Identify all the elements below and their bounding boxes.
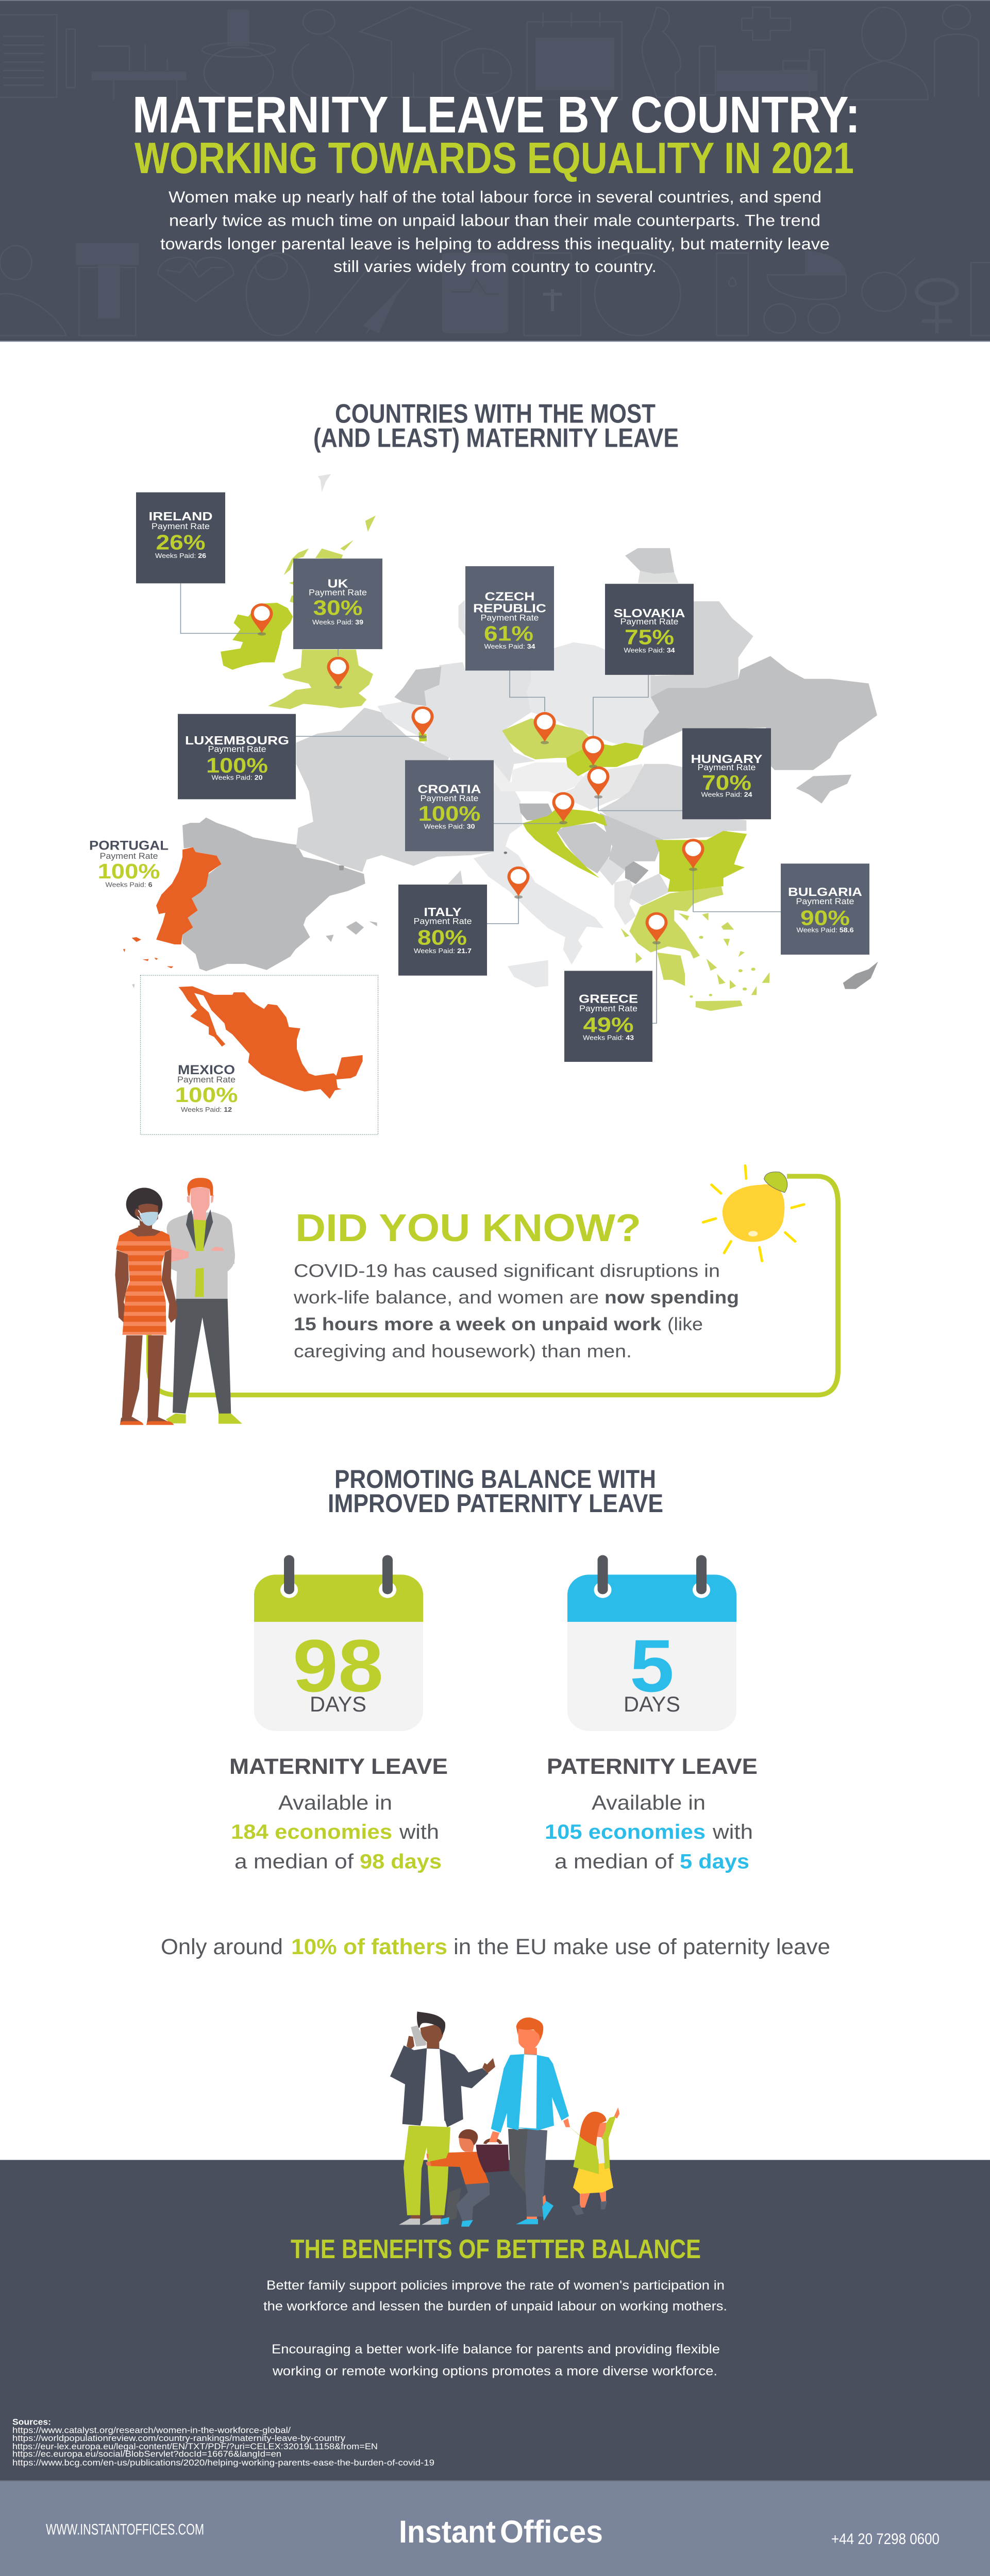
card: Greece bbox=[564, 971, 652, 1062]
map: Spain bbox=[182, 818, 365, 971]
card: Czech Republic: 61% bbox=[484, 622, 533, 645]
text: COVID-19 callout: COVID-19 has caused significant disruptions in bbox=[294, 1261, 720, 1281]
map: Hungary bbox=[557, 764, 644, 809]
woman figure bbox=[115, 1188, 177, 1425]
card: Italy: Weeks Paid: 21.7 bbox=[414, 947, 472, 955]
heading: benefits of better balance: THE BENEFITS OF BETTER BALANCE bbox=[291, 2234, 701, 2264]
map: North Macedonia bbox=[629, 873, 670, 905]
card: Italy bbox=[398, 885, 487, 976]
text: paternity leave stats: with bbox=[712, 1820, 753, 1843]
text: benefits paragraphs: the workforce and lessen the burden of unpaid labour on working mothers. bbox=[263, 2299, 727, 2313]
text: sources: Sources: bbox=[12, 2417, 51, 2427]
card: Ireland: IRELAND bbox=[148, 510, 212, 523]
illustration: family with two fathers and children bbox=[390, 2011, 619, 2227]
footer website: WWW.INSTANTOFFICES.COM bbox=[46, 2521, 204, 2538]
map: United Kingdom bbox=[268, 516, 376, 709]
card: Italy: ITALY bbox=[424, 906, 461, 919]
text: benefits paragraphs bbox=[263, 2278, 727, 2378]
map: Austria bbox=[495, 762, 586, 794]
calendar: paternity 5 days: DAYS bbox=[624, 1692, 680, 1717]
text: COVID-19 callout: (like bbox=[667, 1314, 703, 1334]
map: Ireland bbox=[221, 603, 293, 670]
map pins bbox=[250, 603, 704, 944]
heading: promoting balance: IMPROVED PATERNITY LEAVE bbox=[328, 1489, 663, 1518]
card: Hungary: Weeks Paid: 24 bbox=[701, 791, 752, 799]
text: fathers statistic: in the EU make use of paternity leave bbox=[454, 1935, 830, 1959]
figure: girl bbox=[568, 2107, 619, 2215]
map: Montenegro bbox=[599, 858, 625, 886]
text: COVID-19 callout: caregiving and housework) than men. bbox=[294, 1341, 632, 1361]
panel: benefits of better balance bbox=[0, 2160, 990, 2481]
card: Portugal: 100% bbox=[98, 859, 160, 883]
text: COVID-19 callout: now spending bbox=[605, 1287, 739, 1308]
map: Poland bbox=[527, 642, 659, 749]
card: Croatia: Weeks Paid: 30 bbox=[424, 823, 475, 831]
figure: man on phone bbox=[390, 2011, 495, 2225]
map: Switzerland bbox=[448, 759, 510, 791]
card: Ireland: 26% bbox=[156, 531, 205, 554]
map: Kosovo bbox=[625, 861, 649, 884]
card: Croatia: CROATIA bbox=[417, 783, 481, 796]
map: Bulgaria bbox=[655, 831, 747, 892]
card: Portugal: PORTUGAL bbox=[89, 838, 169, 853]
calendar: paternity 5 days bbox=[567, 1555, 736, 1731]
logo: Instant Offices: Offices bbox=[500, 2515, 603, 2550]
intro text bbox=[160, 188, 830, 276]
text: paternity leave stats: 5 days bbox=[680, 1850, 749, 1873]
card: Bulgaria: Payment Rate bbox=[796, 896, 854, 906]
heading: countries with the most and least maternity leave: (AND LEAST) MATERNITY LEAVE bbox=[313, 423, 679, 453]
card: Greece: GREECE bbox=[579, 992, 638, 1006]
text: maternity leave stats: a median of bbox=[234, 1850, 354, 1873]
intro text: towards longer parental leave is helping to address this inequality, but maternity leave bbox=[160, 234, 830, 253]
card: Greece: Weeks Paid: 43 bbox=[583, 1034, 634, 1041]
map: Luxembourg bbox=[419, 732, 427, 741]
card: Hungary: HUNGARY bbox=[691, 753, 763, 766]
illustration: couple, woman in a mask and man with crossed arms bbox=[115, 1178, 242, 1425]
text: paternity leave stats: Available in bbox=[592, 1791, 706, 1814]
text: COVID-19 callout: work-life balance, and women are bbox=[293, 1287, 599, 1308]
text: maternity leave stats: MATERNITY LEAVE bbox=[229, 1755, 448, 1779]
map: Italy bbox=[474, 782, 603, 988]
text: paternity leave stats: 105 economies bbox=[545, 1820, 706, 1843]
map: Albania bbox=[614, 879, 636, 925]
calendar: maternity 98 days bbox=[254, 1555, 423, 1731]
map: Baltics bbox=[625, 548, 674, 574]
card: Ireland: Payment Rate bbox=[152, 521, 210, 531]
card: Slovakia: Payment Rate bbox=[620, 616, 679, 626]
card: Croatia: Payment Rate bbox=[421, 793, 479, 803]
panel: header bbox=[0, 0, 990, 342]
heading: did you know: DID YOU KNOW? bbox=[295, 1206, 641, 1249]
card: Ireland: Weeks Paid: 26 bbox=[155, 552, 206, 560]
card: Mexico text: MEXICO bbox=[178, 1062, 235, 1077]
card: Czech Republic: Payment Rate bbox=[480, 613, 539, 622]
text: sources bbox=[12, 2417, 434, 2467]
card: Slovakia: SLOVAKIA bbox=[614, 607, 685, 620]
text: benefits paragraphs: working or remote working options promotes a more diverse workforce. bbox=[272, 2363, 717, 2378]
map: Mexico bbox=[178, 986, 363, 1099]
map: Belarus bbox=[651, 601, 753, 697]
calendar: maternity 98 days: 98 bbox=[293, 1624, 383, 1707]
intro text: still varies widely from country to country. bbox=[333, 257, 657, 276]
text: sources: https://worldpopulationreview.com/country-rankings/maternity-leave-by-country bbox=[12, 2433, 345, 2443]
heading: countries with the most and least maternity leave bbox=[313, 399, 679, 453]
panel frame: did you know bbox=[149, 1176, 838, 1395]
card: Czech Republic: CZECH bbox=[484, 590, 534, 603]
card: Bulgaria: 90% bbox=[800, 906, 850, 929]
text: paternity leave stats bbox=[545, 1755, 758, 1873]
card: Hungary: Payment Rate bbox=[698, 762, 756, 772]
logo: Instant Offices bbox=[399, 2515, 603, 2550]
text: maternity leave stats: Available in bbox=[278, 1791, 392, 1814]
card: Croatia: 100% bbox=[418, 802, 480, 825]
map: Slovenia bbox=[519, 804, 552, 820]
intro text: Women make up nearly half of the total labour force in several countries, and spend bbox=[169, 188, 821, 206]
text: paternity leave stats: PATERNITY LEAVE bbox=[547, 1755, 758, 1779]
heading: promoting balance bbox=[328, 1465, 663, 1518]
text: maternity leave stats bbox=[229, 1755, 448, 1873]
intro text: nearly twice as much time on unpaid labour than their male counterparts. The trend bbox=[169, 211, 820, 229]
card: Ireland bbox=[136, 493, 225, 583]
card: Luxembourg: LUXEMBOURG bbox=[185, 734, 289, 748]
card: Portugal: Payment Rate bbox=[99, 851, 158, 861]
card: Hungary bbox=[682, 728, 771, 819]
card: UK bbox=[293, 558, 382, 649]
text: fathers statistic bbox=[161, 1935, 830, 1959]
card: Hungary: 70% bbox=[702, 771, 751, 794]
card: Luxembourg bbox=[178, 714, 296, 799]
map: Bosnia bbox=[557, 823, 612, 873]
card: UK: UK bbox=[328, 577, 348, 590]
text: fathers statistic: 10% of fathers bbox=[291, 1935, 447, 1959]
card: Czech Republic: REPUBLIC bbox=[473, 602, 546, 615]
figure: tall man with bag bbox=[476, 2018, 570, 2224]
text: maternity leave stats: 184 economies bbox=[231, 1820, 392, 1843]
card: UK: Payment Rate bbox=[309, 587, 367, 597]
map: Portugal bbox=[123, 847, 222, 968]
card: Greece: 49% bbox=[583, 1013, 634, 1036]
text: benefits paragraphs: Better family support policies improve the rate of women's participation in bbox=[266, 2278, 725, 2293]
card: Greece: Payment Rate bbox=[579, 1004, 637, 1013]
connector lines bbox=[180, 583, 781, 1023]
card: Luxembourg: 100% bbox=[206, 754, 268, 777]
map: Romania bbox=[599, 764, 746, 840]
text: COVID-19 callout: 15 hours more a week on unpaid work bbox=[294, 1314, 662, 1334]
heading: countries with the most and least maternity leave: COUNTRIES WITH THE MOST bbox=[335, 399, 656, 429]
map: Greece bbox=[621, 886, 769, 1011]
card: Italy: 80% bbox=[417, 926, 467, 949]
map: Slovakia bbox=[566, 743, 644, 776]
map of Europe bbox=[123, 474, 878, 1011]
map: Germany bbox=[424, 662, 535, 782]
card: Czech Republic: Weeks Paid: 34 bbox=[484, 642, 535, 650]
map: Croatia bbox=[523, 808, 607, 878]
card: UK: 30% bbox=[313, 596, 362, 619]
card: Croatia bbox=[405, 760, 494, 851]
map: Belgium bbox=[377, 702, 429, 745]
map: Ukraine bbox=[642, 656, 877, 770]
card: Mexico text bbox=[175, 1062, 238, 1113]
calendar: paternity 5 days: 5 bbox=[630, 1624, 674, 1707]
text: fathers statistic: Only around bbox=[161, 1935, 283, 1959]
panel: Mexico inset bbox=[140, 975, 378, 1134]
heading: promoting balance: PROMOTING BALANCE WITH bbox=[334, 1465, 656, 1494]
title bbox=[132, 87, 860, 182]
card: Mexico text: Payment Rate bbox=[177, 1074, 236, 1084]
card: Bulgaria: Weeks Paid: 58.6 bbox=[797, 926, 853, 934]
card: Luxembourg: Weeks Paid: 20 bbox=[211, 774, 263, 781]
man figure bbox=[166, 1178, 242, 1423]
card: Mexico text: 100% bbox=[175, 1083, 238, 1106]
card: Italy: Payment Rate bbox=[413, 916, 472, 926]
map: Czech Republic bbox=[502, 718, 595, 759]
card: Bulgaria bbox=[781, 863, 869, 955]
card: Portugal: Weeks Paid: 6 bbox=[105, 881, 152, 888]
text: benefits paragraphs: Encouraging a better work-life balance for parents and providing flexible bbox=[272, 2342, 720, 2357]
map: Netherlands bbox=[394, 667, 441, 706]
text: maternity leave stats: 98 days bbox=[360, 1850, 442, 1873]
card: Slovakia: Weeks Paid: 34 bbox=[624, 647, 675, 654]
text: paternity leave stats: a median of bbox=[555, 1850, 674, 1873]
text: sources: https://www.bcg.com/en-us/publications/2020/helping-working-parents-ease-the-burden-of-covid-19 bbox=[12, 2458, 434, 2467]
panel: footer bbox=[0, 2481, 990, 2576]
figure: boy bbox=[426, 2129, 490, 2227]
text: sources: https://ec.europa.eu/social/BlobServlet?docId=16676&langId=en bbox=[12, 2449, 281, 2459]
card: UK: Weeks Paid: 39 bbox=[312, 618, 363, 626]
calendar: maternity 98 days: DAYS bbox=[310, 1692, 366, 1717]
map: Serbia bbox=[599, 812, 664, 870]
card: Portugal bbox=[89, 838, 169, 888]
icons: faint healthcare background pattern bbox=[0, 5, 990, 335]
text: maternity leave stats: with bbox=[399, 1820, 439, 1843]
icon: lightbulb with rays bbox=[703, 1165, 804, 1261]
card: Slovakia: 75% bbox=[625, 625, 674, 649]
card: Luxembourg: Payment Rate bbox=[208, 744, 266, 754]
text: COVID-19 callout bbox=[293, 1261, 739, 1361]
card: Slovakia bbox=[605, 584, 694, 675]
footer phone: +44 20 7298 0600 bbox=[831, 2530, 939, 2548]
text: sources: https://www.catalyst.org/research/women-in-the-workforce-global/ bbox=[12, 2425, 291, 2435]
logo: Instant Offices: Instant bbox=[399, 2515, 496, 2550]
map: Cyprus bbox=[843, 961, 878, 989]
text: sources: https://eur-lex.europa.eu/legal-content/EN/TXT/PDF/?uri=CELEX:32019L1158&from=EN bbox=[12, 2442, 378, 2451]
card: Bulgaria: BULGARIA bbox=[788, 886, 862, 899]
card: Mexico text: Weeks Paid: 12 bbox=[181, 1106, 232, 1113]
card: Czech Republic bbox=[465, 566, 554, 671]
map: France bbox=[296, 708, 494, 872]
